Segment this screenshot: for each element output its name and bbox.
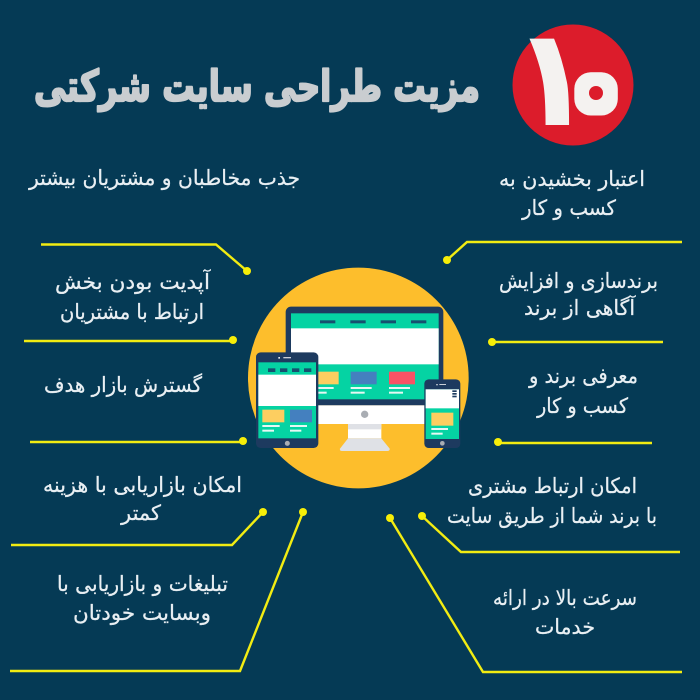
item: branding: برندسازی و افزایش [499,269,658,293]
badge: number 10: ۱ [510,0,594,158]
illustration: responsive devices [248,268,469,488]
badge: number 10: ۰ [578,56,614,126]
item: branding: آگاهی از برند [524,295,636,320]
item: credibility [499,167,645,220]
item: low cost marketing [43,473,242,525]
connector: right 4 [418,512,680,552]
icon: phone [424,379,460,448]
connector: left 5 [10,508,307,671]
item: customer contact [447,474,657,528]
item: introduction: معرفی برند و [528,364,638,388]
item: advertising: وبسایت خودتان [73,601,211,625]
connector: right 5 [386,514,682,672]
item: introduction [528,364,638,418]
item: credibility: اعتبار بخشیدن به [499,167,645,191]
connector: left 3 [30,437,247,445]
icon: tablet [256,352,318,448]
item: audience: جذب مخاطبان و مشتریان بیشتر [28,166,300,190]
item: speed: سرعت بالا در ارائه [493,586,637,610]
title: مزیت طراحی سایت شرکتی [34,62,480,112]
item: introduction: کسب و کار [536,394,628,418]
item: customer contact: با برند شما از طریق سایت [447,504,657,528]
item: customer contact: امکان ارتباط مشتری [468,474,637,498]
connector: right 3 [494,438,652,446]
connector: left 1 [41,244,251,275]
connector: right 1 [443,242,682,264]
item: branding [499,269,658,320]
item: low cost marketing: کمتر [120,501,161,525]
item: update [55,269,211,324]
item: advertising: تبلیغات و بازاریابی با [57,572,228,596]
item: speed [493,586,637,639]
badge: number 10 [510,0,634,158]
item: update: ارتباط با مشتریان [60,300,204,324]
item: low cost marketing: امکان بازاریابی با هزینه [43,473,242,497]
connector: left 4 [11,508,267,545]
icon: desktop monitor [286,307,443,451]
item: target market: گسترش بازار هدف [44,373,202,397]
connector: left 2 [24,336,237,344]
item: advertising [57,572,228,625]
connector: right 2 [488,338,663,346]
item: credibility: کسب و کار [521,196,616,220]
item: speed: خدمات [535,615,595,639]
item: update: آپدیت بودن بخش [55,269,211,294]
